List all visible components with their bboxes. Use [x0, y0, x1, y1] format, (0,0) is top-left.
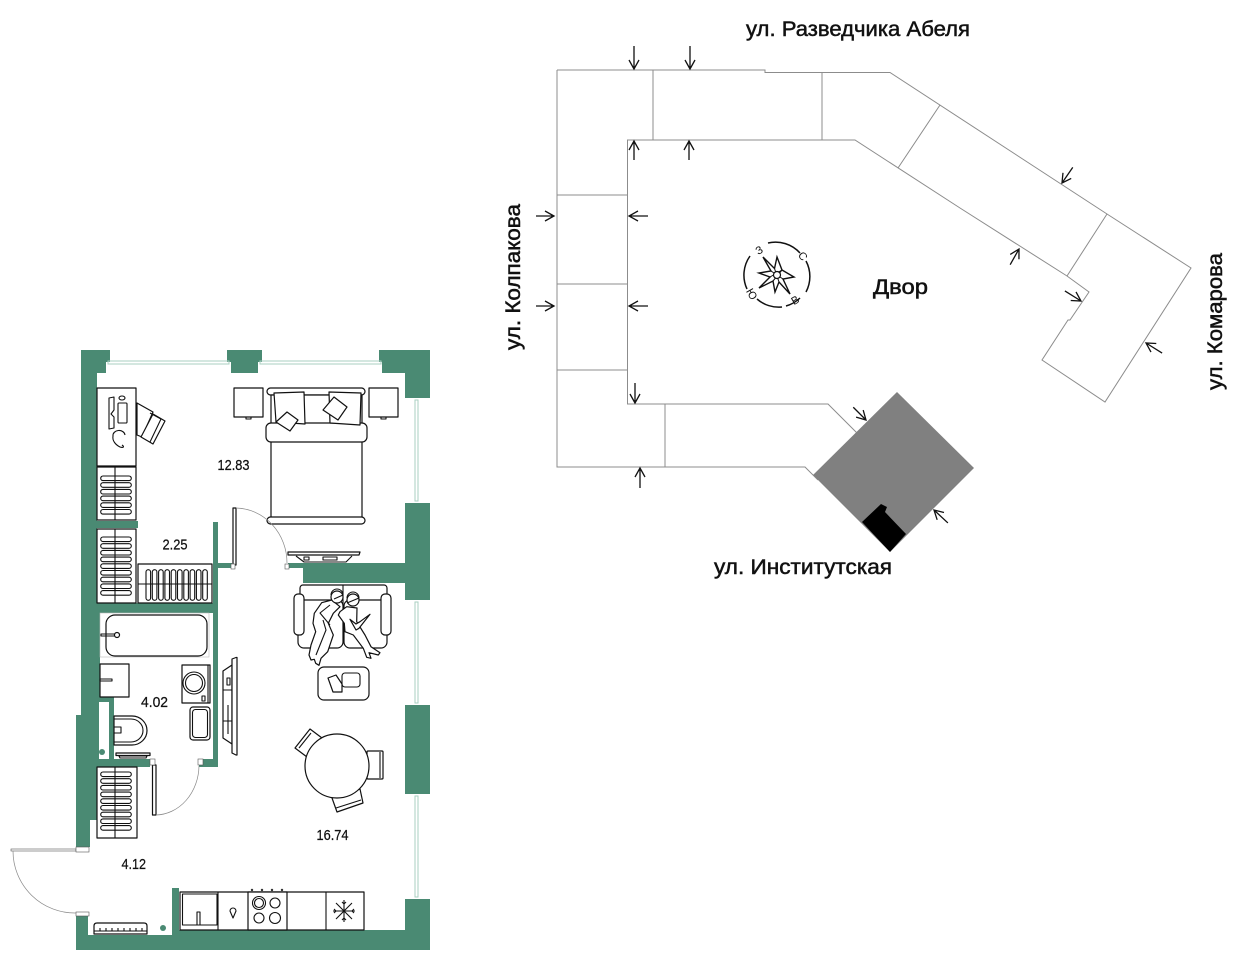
- walls: [76, 350, 430, 950]
- door: bathroom: [150, 759, 203, 815]
- label: courtyard: Двор: [873, 276, 928, 299]
- entrance arrows: [536, 46, 1165, 527]
- icon: gas drop: [230, 908, 236, 918]
- furniture: hallway wardrobe: [97, 767, 137, 838]
- street label: bottom: ул. Институтская: [714, 556, 892, 579]
- door: bedroom: [231, 508, 289, 569]
- street label: top: ул. Разведчика Абеля: [746, 18, 970, 41]
- furniture: wardrobe upper: [97, 467, 136, 520]
- room area: 4.02: 4.02: [141, 694, 168, 711]
- icon: snowflake fridge: [333, 900, 355, 922]
- furniture: dining table and chairs: [295, 729, 383, 812]
- furniture: bedroom tv: [288, 552, 360, 562]
- furniture: nightstands: [234, 388, 398, 419]
- building outline: [557, 70, 1191, 480]
- panel: apartment floor plan: [11, 350, 430, 950]
- door: entrance: [11, 847, 89, 916]
- furniture: basin: [190, 707, 210, 740]
- highlighted apartment: [862, 504, 906, 552]
- furniture: bed: [266, 388, 367, 524]
- hob: [248, 889, 287, 930]
- room area: 16.74: 16.74: [316, 827, 348, 844]
- compass letter east: В: [789, 294, 802, 308]
- furniture: toilet: [114, 716, 150, 758]
- furniture: sofa: [294, 585, 391, 648]
- street label: right: ул. Комарова: [1204, 253, 1227, 390]
- room area: 4.12: 4.12: [122, 856, 146, 873]
- kitchen counter: [180, 889, 364, 930]
- furniture: coffee table: [318, 667, 369, 700]
- furniture: bathtub: [100, 613, 209, 657]
- furniture: washing machine: [182, 665, 210, 703]
- room area: 12.83: 12.83: [218, 457, 250, 474]
- furniture: wardrobe closet bottom: [138, 564, 212, 603]
- windows: [106, 350, 430, 899]
- kitchen sink: [182, 894, 217, 925]
- street label: left: ул. Колпакова: [502, 204, 525, 350]
- room area: 2.25: 2.25: [162, 536, 188, 554]
- furniture: bathroom sink: [100, 664, 129, 697]
- panel: site plan: [502, 18, 1227, 579]
- highlighted section: [813, 392, 974, 552]
- compass letter south: Ю: [743, 287, 759, 302]
- icon: compass: [743, 242, 810, 308]
- furniture: desk and chair: [97, 388, 165, 466]
- compass letter north: С: [795, 250, 809, 263]
- compass letter west: З: [754, 244, 766, 258]
- illustration: couple on sofa: [309, 589, 380, 665]
- furniture: wardrobe closet left: [97, 529, 136, 603]
- furniture: tv stand: [223, 658, 237, 755]
- radiator: [94, 923, 166, 934]
